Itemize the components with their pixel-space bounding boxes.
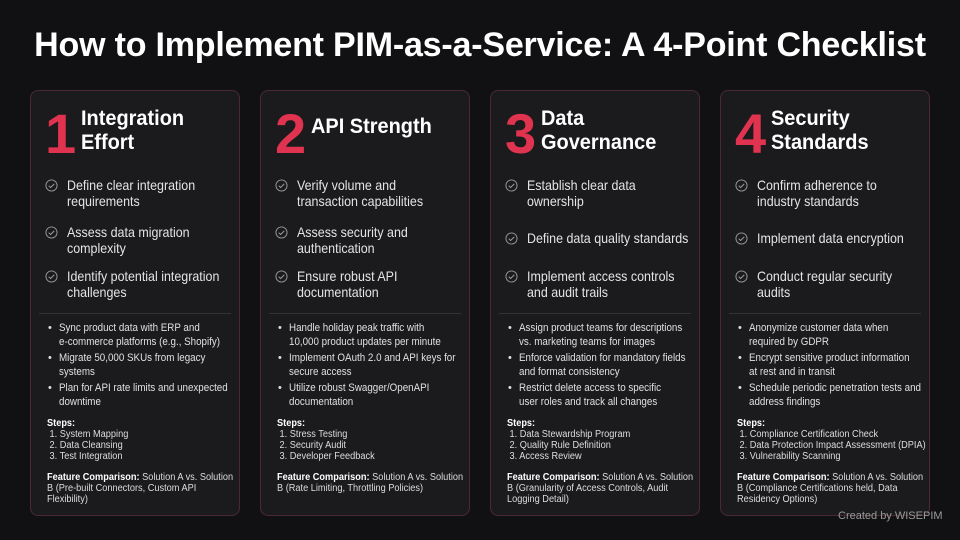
bullet [278,322,441,348]
feature comparison: Feature Comparison: Solution A vs. Solution [277,472,463,483]
bullet [508,352,686,378]
panel: integration effort: Plan for API rate limits and unexpected [59,382,228,394]
steps: 1. Data Stewardship Program [510,429,630,440]
panel: security standards: address findings [749,396,820,408]
panel: api strength: secure access [289,366,352,378]
steps [277,418,375,462]
steps: 2. Data Cleansing [50,440,123,451]
panel: security standards: Implement data encryption [757,230,904,246]
number 1: 1 [45,102,76,165]
panel: api strength: Implement OAuth 2.0 and API keys for [289,352,456,364]
heading [771,107,869,154]
panel: integration effort: e-commerce platforms (e.g., Shopify) [59,336,220,348]
panel: integration effort: systems [59,366,95,378]
bullet [738,322,888,348]
panel: security standards: at rest and in transit [749,366,835,378]
panel: api strength: authentication [297,240,375,256]
feature comparison [737,472,923,505]
panel: api strength: transaction capabilities [297,193,423,209]
panel: api strength: Utilize robust Swagger/OpenAPI [289,382,429,394]
panel: security standards: Anonymize customer data when [749,322,888,334]
bullet [508,382,661,408]
check item [46,224,190,256]
number 3: 3 [505,102,536,165]
panel: api strength: Handle holiday peak traffic with [289,322,424,334]
check item [276,224,408,256]
bullet [738,352,910,378]
panel: data governance: ownership [527,193,584,209]
steps: 1. System Mapping [50,429,128,440]
panel: security standards: audits [757,284,790,300]
bullet [738,382,921,408]
panel: data governance: Define data quality standards [527,230,688,246]
credit: Created by WISEPIM [838,510,943,522]
panel: api strength: Assess security and [297,224,408,240]
panel: integration effort: • [48,322,52,334]
feature comparison: Feature Comparison: Solution A vs. Solution [507,472,693,483]
feature comparison: B (Pre-built Connectors, Custom API [47,483,196,494]
bullet [278,382,429,408]
heading: Integration [81,107,184,130]
steps: 1. Stress Testing [280,429,347,440]
steps: 3. Test Integration [50,451,123,462]
panel: integration effort: • [48,382,52,394]
feature comparison: B (Compliance Certifications held, Data [737,483,898,494]
panel: security standards: • [738,382,742,394]
heading: Effort [81,131,134,154]
check item [276,177,423,209]
panel: data governance: and audit trails [527,284,608,300]
check item [46,268,219,300]
panel: api strength: • [278,352,282,364]
number 2: 2 [275,102,306,165]
panel: api strength: • [278,322,282,334]
check item [506,177,636,209]
panel: integration effort: Sync product data with ERP and [59,322,200,334]
panel: data governance: vs. marketing teams for images [519,336,655,348]
steps: 2. Quality Rule Definition [510,440,611,451]
panel: integration effort: challenges [67,284,127,300]
feature comparison: Logging Detail) [507,494,569,505]
panel: integration effort: requirements [67,193,140,209]
steps: 3. Access Review [510,451,582,462]
feature comparison: B (Granularity of Access Controls, Audit [507,483,668,494]
feature comparison: Flexibility) [47,494,88,505]
panel: data governance: and format consistency [519,366,620,378]
panel: api strength: • [278,382,282,394]
panel: security standards: Confirm adherence to [757,177,877,193]
check item [736,268,892,300]
panel: integration effort [30,90,240,516]
steps: 3. Developer Feedback [280,451,375,462]
heading: Standards [771,131,869,154]
feature comparison [507,472,693,505]
steps: Steps: [47,418,75,429]
panel: data governance: • [508,322,512,334]
panel: security standards [720,90,930,516]
number 4: 4 [735,102,766,165]
check item [736,230,904,246]
heading: Security [771,107,850,130]
panel: api strength: 10,000 product updates per minute [289,336,441,348]
heading: Governance [541,131,656,154]
panel: data governance: Assign product teams for descriptions [519,322,682,334]
feature comparison [277,472,463,494]
heading [81,107,184,154]
feature comparison: Residency Options) [737,494,817,505]
panel: security standards: • [738,352,742,364]
steps [47,418,128,462]
panel: security standards: • [738,322,742,334]
check item [276,268,397,300]
panel: integration effort: complexity [67,240,126,256]
panel: api strength [260,90,470,516]
bullet [48,352,206,378]
panel: api strength: Verify volume and [297,177,396,193]
steps [507,418,630,462]
steps: Steps: [277,418,305,429]
panel: integration effort: Define clear integration [67,177,195,193]
panel: data governance: Restrict delete access to specific [519,382,661,394]
panel: integration effort: Migrate 50,000 SKUs from legacy [59,352,205,364]
panel: data governance: Enforce validation for mandatory fields [519,352,686,364]
feature comparison: B (Rate Limiting, Throttling Policies) [277,483,423,494]
panel: security standards: required by GDPR [749,336,829,348]
panel: integration effort: downtime [59,396,101,408]
steps: 2. Security Audit [280,440,346,451]
panel: api strength: documentation [297,284,379,300]
bullet [48,382,228,408]
panel: data governance [490,90,700,516]
feature comparison: Feature Comparison: Solution A vs. Solution [737,472,923,483]
steps: 3. Vulnerability Scanning [740,451,840,462]
panel: data governance: Implement access controls [527,268,675,284]
panel: security standards: Schedule periodic penetration tests and [749,382,921,394]
check item [506,230,688,246]
panel: data governance: user roles and track all changes [519,396,657,408]
feature comparison [47,472,233,505]
panel: integration effort: Identify potential integration [67,268,219,284]
panel: integration effort: Assess data migration [67,224,190,240]
panel: integration effort: • [48,352,52,364]
bullet [508,322,682,348]
panel: security standards: industry standards [757,193,859,209]
steps: Steps: [507,418,535,429]
panel: security standards: Encrypt sensitive product information [749,352,910,364]
feature comparison: Feature Comparison: Solution A vs. Solution [47,472,233,483]
panel: data governance: Establish clear data [527,177,636,193]
check item [46,177,195,209]
steps: 1. Compliance Certification Check [740,429,878,440]
steps [737,418,926,462]
heading: API Strength [311,115,432,138]
steps: Steps: [737,418,765,429]
check item [506,268,675,300]
bullet [48,322,220,348]
steps: 2. Data Protection Impact Assessment (DPIA) [740,440,926,451]
title: How to Implement PIM-as-a-Service: A 4-Point Checklist [34,26,926,64]
panel: security standards: Conduct regular security [757,268,892,284]
check item [736,177,877,209]
panel: data governance: • [508,352,512,364]
heading [541,107,656,154]
panel: api strength: documentation [289,396,353,408]
heading: Data [541,107,584,130]
panel: api strength: Ensure robust API [297,268,397,284]
bullet [278,352,456,378]
panel: data governance: • [508,382,512,394]
